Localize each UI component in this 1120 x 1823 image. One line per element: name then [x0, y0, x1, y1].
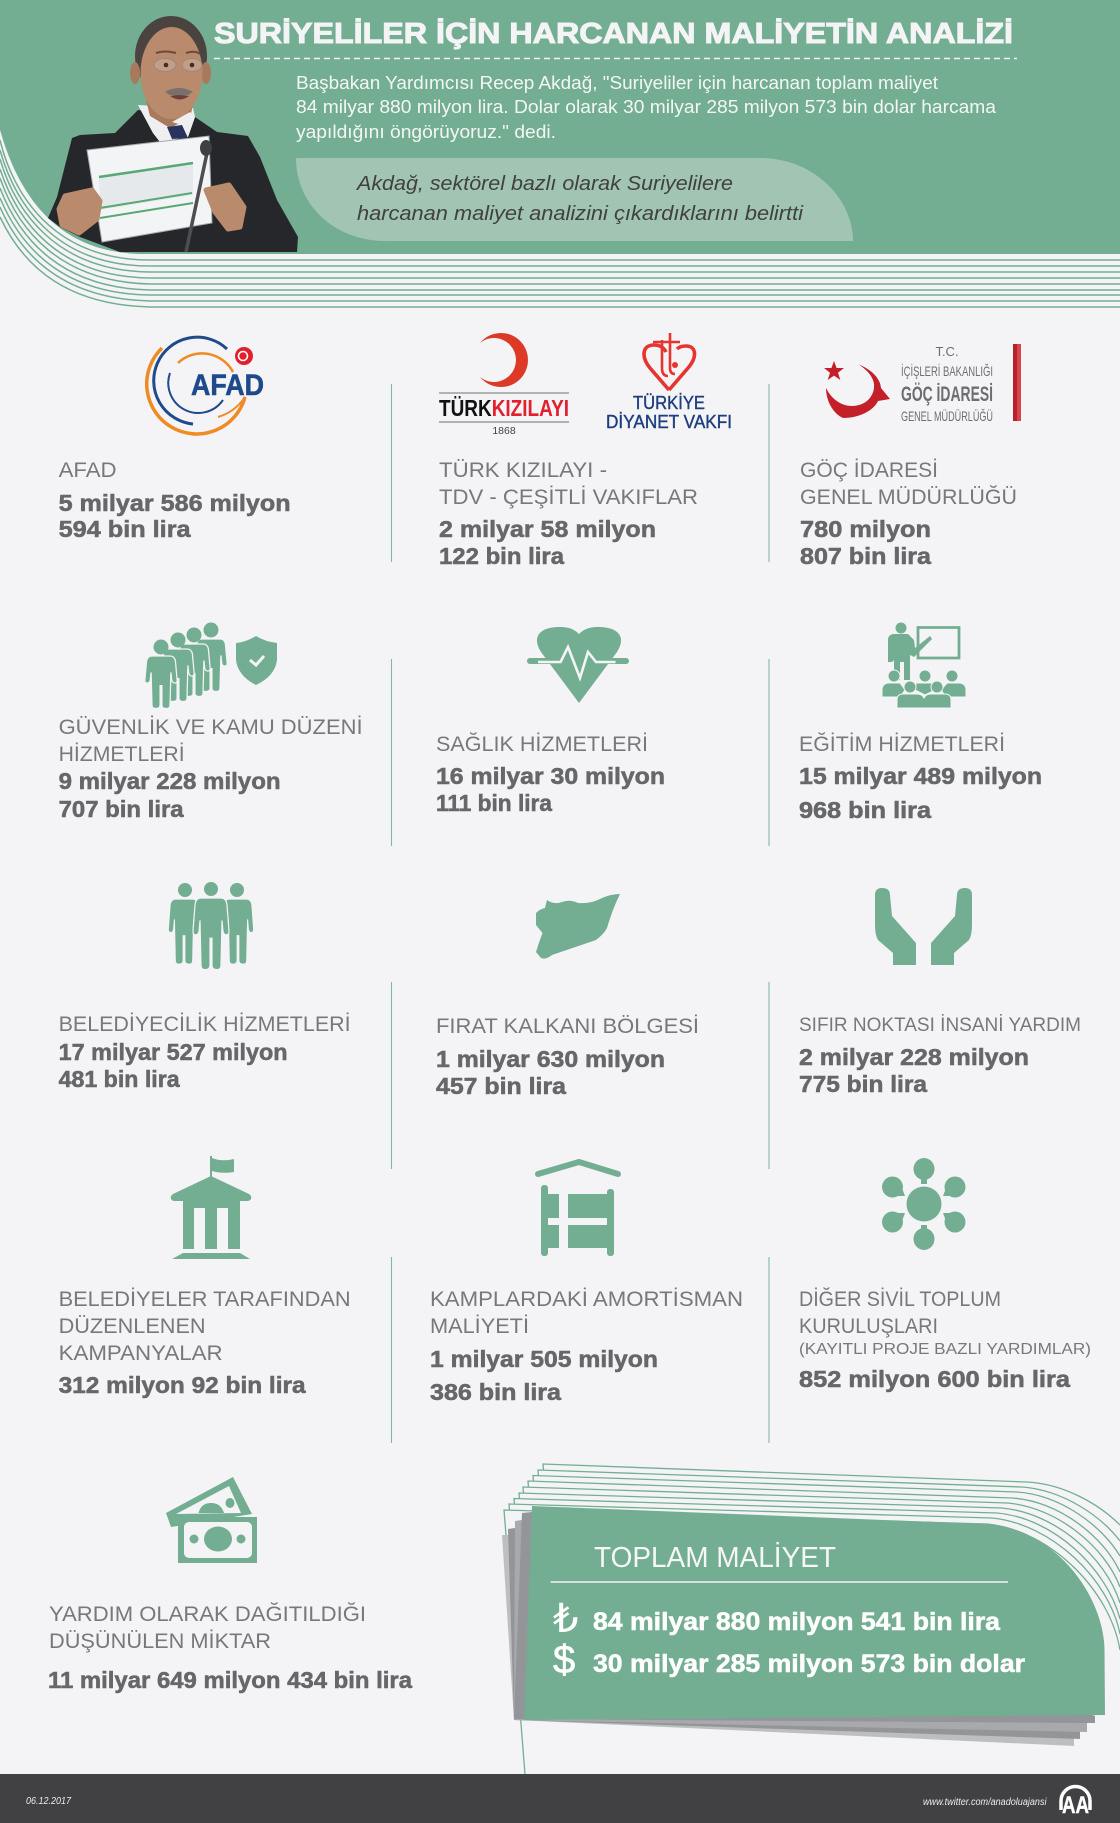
header band [0, 0, 1120, 307]
panel: Türk Kızılayı - TDV: 2 milyar 58 milyon [439, 516, 656, 542]
icon: heart with pulse [527, 627, 629, 703]
panel: Güvenlik ve kamu düzeni: 707 bin lira [59, 796, 184, 822]
total heading: TOPLAM MALİYET [594, 1541, 836, 1574]
icon: camp shelter [538, 1162, 618, 1256]
panel: AFAD [59, 337, 291, 542]
panel: Kamplardaki amortisman maliyeti: MALİYETİ [430, 1315, 529, 1338]
panel: Fırat Kalkanı bölgesi: 457 bin lira [436, 1073, 566, 1099]
panel: Türk Kızılayı - TDV: TDV - ÇEŞİTLİ VAKIFLAR [439, 486, 698, 509]
total in dollars [553, 1638, 1025, 1682]
title: SURİYELİLER İÇİN HARCANAN MALİYETİN ANALİZİ [214, 18, 1013, 50]
panel: Sağlık hizmetleri: 16 milyar 30 milyon [436, 763, 665, 789]
panel: Diğer sivil toplum kuruluşları: 852 milyon 600 bin lira [799, 1366, 1070, 1392]
panel: Sağlık hizmetleri: 111 bin lira [436, 790, 552, 816]
outlined paper stack [504, 1464, 1120, 1774]
icon: AFAD logo [147, 337, 264, 434]
source url: www.twitter.com/anadoluajansi [923, 1797, 1047, 1808]
panel: Belediyeler tarafından kampanyalar: 312 milyon 92 bin lira [59, 1372, 306, 1398]
panel: Güvenlik ve kamu düzeni: GÜVENLİK VE KAMU DÜZENİ [59, 716, 363, 739]
panel: Sağlık hizmetleri: SAĞLIK HİZMETLERİ [436, 733, 648, 756]
panel: Eğitim hizmetleri [799, 622, 1042, 823]
panel: Sıfır noktası insani yardım: SIFIR NOKTASI İNSANİ YARDIM [799, 1015, 1081, 1036]
icon: banknotes [166, 1477, 257, 1563]
panel: Göç İdaresi: GENEL MÜDÜRLÜĞÜ [800, 486, 1017, 509]
icon: map of Syria [536, 894, 620, 959]
panel: Belediyecilik hizmetleri [59, 882, 351, 1092]
panel: toplam maliyet [502, 1464, 1120, 1774]
intro text: yapıldığını öngörüyoruz." dedi. [296, 121, 556, 142]
panel: Sağlık hizmetleri [436, 627, 665, 816]
icon: AFAD logo: AFAD [191, 369, 264, 402]
total in lira [553, 1596, 1001, 1642]
panel: Türk Kızılayı - TDV: TÜRK KIZILAYI - [439, 459, 607, 482]
panel: Fırat Kalkanı bölgesi [436, 894, 699, 1099]
grey paper stack [502, 1512, 1095, 1746]
icon: Türkiye Diyanet Vakfı logo: DİYANET VAKFI [606, 412, 732, 432]
panel: Belediyeler tarafından kampanyalar: BELEDİYELER TARAFINDAN [59, 1288, 351, 1311]
panel: Güvenlik ve kamu düzeni: 9 milyar 228 milyon [59, 768, 281, 794]
panel: Eğitim hizmetleri: 968 bin lira [799, 797, 931, 823]
panel: Fırat Kalkanı bölgesi: FIRAT KALKANI BÖLGESİ [436, 1015, 699, 1038]
intro text: 84 milyar 880 milyon lira. Dolar olarak 30 milyar 285 milyon 573 bin dolar harcama [296, 96, 997, 117]
icon: Türk Kızılayı logo [439, 333, 569, 437]
icon: open hands [875, 888, 972, 965]
panel: Türk Kızılayı - TDV [439, 333, 732, 569]
quote callout [296, 158, 853, 241]
panel: Göç İdaresi: 807 bin lira [800, 543, 931, 569]
panel: Eğitim hizmetleri: EĞİTİM HİZMETLERİ [799, 733, 1005, 756]
panel: Sıfır noktası insani yardım [799, 888, 1081, 1097]
panel: AFAD: AFAD [59, 459, 117, 482]
icon: AA logo [1061, 1786, 1090, 1819]
panel: Fırat Kalkanı bölgesi: 1 milyar 630 milyon [436, 1046, 665, 1072]
panel: Diğer sivil toplum kuruluşları [799, 1158, 1091, 1392]
icon: Göç İdaresi logo: İÇİŞLERİ BAKANLIĞI [901, 362, 993, 379]
icon: AA logo: AA [1062, 1792, 1089, 1819]
panel: Türk Kızılayı - TDV: 122 bin lira [439, 543, 564, 569]
icon: Türk Kızılayı logo: 1868 [492, 425, 516, 437]
icon: network of circles [882, 1158, 966, 1250]
panel: Kamplardaki amortisman maliyeti: 386 bin lira [430, 1379, 561, 1405]
panel: AFAD: 5 milyar 586 milyon [59, 490, 291, 516]
panel: Kamplardaki amortisman maliyeti [430, 1162, 743, 1405]
icon: Göç İdaresi logo [824, 344, 1021, 424]
total in lira: ₺ [553, 1596, 578, 1642]
footer bar [0, 1774, 1120, 1823]
total in dollars: $ [553, 1638, 575, 1682]
panel: Belediyecilik hizmetleri: 481 bin lira [59, 1066, 180, 1092]
panel: Diğer sivil toplum kuruluşları: KURULUŞLARI [799, 1315, 938, 1338]
icon: Göç İdaresi logo: T.C. [935, 344, 959, 359]
icon: municipal building with flag [171, 1156, 251, 1259]
panel: Belediyecilik hizmetleri: BELEDİYECİLİK HİZMETLERİ [59, 1013, 351, 1036]
icon: Göç İdaresi logo: GÖÇ İDARESİ [901, 383, 993, 406]
quote callout: Akdağ, sektörel bazlı olarak Suriyelilere [356, 173, 733, 195]
panel: Kamplardaki amortisman maliyeti: 1 milyar 505 milyon [430, 1346, 658, 1372]
panel: Göç İdaresi [800, 344, 1021, 569]
total in dollars: 30 milyar 285 milyon 573 bin dolar [593, 1650, 1025, 1678]
green card [524, 1506, 1105, 1720]
panel: Belediyecilik hizmetleri: 17 milyar 527 milyon [59, 1039, 288, 1065]
panel: yardım olarak dağıtıldığı düşünülen miktar: 11 milyar 649 milyon 434 bin lira [48, 1667, 412, 1693]
icon: three men [168, 882, 254, 970]
panel: Diğer sivil toplum kuruluşları: DİĞER SİVİL TOPLUM [799, 1288, 1001, 1311]
quote callout: harcanan maliyet analizini çıkardıklarını belirtti [357, 203, 804, 225]
panel: AFAD: 594 bin lira [59, 516, 191, 542]
panel: Kamplardaki amortisman maliyeti: KAMPLARDAKİ AMORTİSMAN [430, 1288, 743, 1311]
icon: Türk Kızılayı logo: TÜRKKIZILAYI [439, 395, 569, 421]
date: 06.12.2017 [26, 1796, 71, 1807]
panel: Eğitim hizmetleri: 15 milyar 489 milyon [799, 763, 1042, 789]
panel: yardım olarak dağıtıldığı düşünülen miktar: YARDIM OLARAK DAĞITILDIĞI [49, 1603, 366, 1626]
intro text: Başbakan Yardımcısı Recep Akdağ, "Suriyeliler için harcanan toplam maliyet [296, 72, 938, 93]
icon: Türkiye Diyanet Vakfı logo: TÜRKİYE [633, 393, 705, 413]
total in lira: 84 milyar 880 milyon 541 bin lira [593, 1608, 1001, 1636]
column dividers [392, 384, 769, 1443]
icon: teacher and class [882, 622, 966, 708]
panel: Göç İdaresi: GÖÇ İDARESİ [800, 459, 938, 482]
icon: Göç İdaresi logo: GENEL MÜDÜRLÜĞÜ [901, 407, 993, 424]
icon: people and shield [145, 622, 277, 708]
panel: Belediyeler tarafından kampanyalar: KAMPANYALAR [59, 1342, 223, 1365]
panel: Sıfır noktası insani yardım: 2 milyar 228 milyon [799, 1044, 1029, 1070]
panel: Güvenlik ve kamu düzeni: HİZMETLERİ [59, 743, 185, 766]
panel: yardım olarak dağıtıldığı düşünülen miktar: DÜŞÜNÜLEN MİKTAR [49, 1630, 271, 1653]
intro text [296, 72, 997, 142]
panel: yardım olarak dağıtıldığı düşünülen miktar [48, 1477, 412, 1693]
panel: Belediyeler tarafından kampanyalar: DÜZENLENEN [59, 1315, 206, 1338]
panel: Diğer sivil toplum kuruluşları: (KAYITLI PROJE BAZLI YARDIMLAR) [799, 1341, 1091, 1358]
panel: Belediyeler tarafından kampanyalar [59, 1156, 351, 1398]
photo: speaker holding a document [48, 16, 298, 252]
panel: Göç İdaresi: 780 milyon [800, 516, 931, 542]
icon: Türkiye Diyanet Vakfı logo [606, 333, 732, 432]
panel: Sıfır noktası insani yardım: 775 bin lira [799, 1071, 927, 1097]
panel: Güvenlik ve kamu düzeni [59, 622, 363, 822]
